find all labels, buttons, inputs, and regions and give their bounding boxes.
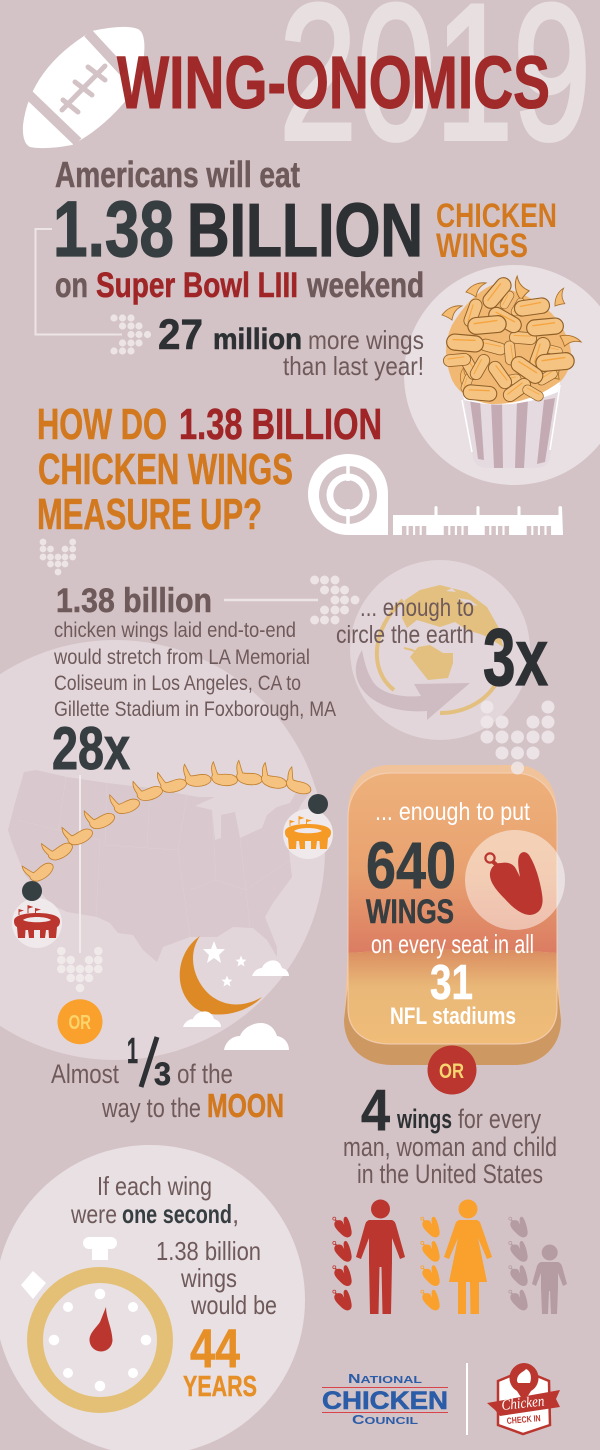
panel: stopwatch circle [0,1145,305,1450]
small dot over panel [511,762,524,774]
icon: tape measure [308,454,563,535]
icon: dotted heart arrow [57,947,103,992]
text: almost 1/3 of the way to the moon: 1 [127,1030,138,1071]
text: 1.38 billion laid end-to-end: would stretch from LA Memorial [53,645,310,669]
text: one second = 44 years: wings [180,1263,237,1293]
heading: how do 1.38 billion chicken wings measure up: HOW DO [37,401,167,449]
vertical connector line [79,775,81,953]
heading: how do 1.38 billion chicken wings measure up: CHICKEN WINGS [38,446,293,494]
headline: 1.38 billion chicken wings: CHICKEN [436,197,557,235]
text: almost 1/3 of the way to the moon: Almost [51,1059,119,1089]
headline: 1.38 billion chicken wings: 1.38 [53,184,174,273]
large circle behind US map [0,640,325,1060]
circle with drumstick icon [465,830,565,930]
icon: dotted heart arrow small [40,539,76,575]
icon: stopwatch [21,1237,165,1405]
icon: dotted heart arrow to panel [480,700,554,760]
text: enough to circle the earth 3x: 3x [483,613,548,703]
text: 27 million more wings: million [213,323,302,356]
text: 1.38 billion laid end-to-end: Coliseum in Los Angeles, CA to [54,671,301,695]
icon: bucket of wings [442,275,581,468]
icon: dotted arrow [110,314,151,355]
icon: orange stadium Foxborough [283,794,333,859]
bucket [462,382,560,468]
text: 4 wings for every man, woman and child: 4 [361,1078,390,1143]
icon: woman with 4 wings [421,1200,492,1314]
panel text: on every seat in all [371,929,534,959]
headline: 1.38 billion chicken wings [53,154,557,305]
chain of chicken wings LA to Foxborough [21,760,315,886]
logo: Chicken Check In: CHECK IN [506,1413,541,1426]
badge: OR orange: OR [68,1012,91,1034]
text: 4 wings for every man, woman and child: for every [458,1104,541,1134]
text: one second = 44 years: YEARS [183,1371,257,1403]
panel text: 31 [430,956,473,1010]
text: 1.38 billion laid end-to-end: Gillette Stadium in Foxborough, MA [54,697,337,721]
text: almost 1/3 of the way to the moon: MOON [207,1087,284,1124]
text: enough to circle the earth 3x: circle the earth [336,621,474,649]
text: 27 million more wings: than last year! [283,351,424,381]
icon: child with 4 wings [509,1217,567,1314]
text: one second = 44 years: were [70,1199,117,1229]
text: enough to circle the earth 3x [336,594,548,703]
heading: how do 1.38 billion chicken wings measure up: MEASURE UP? [37,491,262,539]
headline: 1.38 billion chicken wings: on [55,266,88,305]
bracket connector [36,229,122,334]
heading: how do 1.38 billion chicken wings measure up: 1.38 BILLION [179,401,382,449]
panel text: NFL stadiums [390,1003,516,1030]
logo: National Chicken Council: N ATIONAL [348,1371,423,1386]
logo: Chicken Check In: Chicken [501,1394,545,1414]
heading: how do 1.38 billion chicken wings measure up [37,401,382,539]
wing pile [442,275,581,404]
text: enough to circle the earth 3x: ... enough to [360,594,474,622]
text: 4 wings for every man, woman and child: in the United States [357,1159,543,1189]
icon: moon, stars and clouds [180,936,289,1050]
text: one second = 44 years: , [232,1199,239,1229]
text: 27 million more wings [158,311,424,381]
icon: dotted arrow right [310,576,360,624]
text: 4 wings for every man, woman and child: wings [396,1104,452,1134]
divider [466,1363,468,1435]
headline: 1.38 billion chicken wings: weekend [306,266,424,305]
logo: National Chicken Council [322,1371,448,1427]
logo: National Chicken Council: C OUNCIL [352,1412,419,1427]
text: one second = 44 years: 44 [190,1317,240,1379]
panel: stadium seat [344,762,565,1065]
icon: globe [377,585,503,713]
text: 1.38 billion laid end-to-end [53,582,337,721]
text: one second = 44 years: one second [122,1199,232,1229]
badge: OR red: OR [439,1060,464,1083]
text: 27 million more wings: 27 [158,311,203,359]
stat: 28x: 28x [52,715,130,782]
text: one second = 44 years: If each wing [97,1171,212,1201]
logo: Chicken Check In [487,1363,560,1434]
icon: red stadium Los Angeles [12,881,62,948]
text: 1.38 billion laid end-to-end: 1.38 billion [56,582,212,620]
text: almost 1/3 of the way to the moon: of the [177,1059,233,1089]
panel text: 640 [366,828,456,902]
headline: 1.38 billion chicken wings: BILLION [187,188,423,272]
headline: 1.38 billion chicken wings: Super Bowl LIII [96,266,298,305]
text: 4 wings for every man, woman and child [343,1078,557,1189]
text: 27 million more wings: more wings [308,325,424,355]
text: almost 1/3 of the way to the moon: 3 [154,1056,171,1092]
text: almost 1/3 of the way to the moon: way to the [101,1093,201,1123]
icon: football [23,27,144,148]
map: United States [8,770,312,962]
big circle behind bucket [404,265,600,485]
panel text [366,798,534,1030]
badge: OR orange [58,999,102,1044]
text: one second = 44 years: would be [190,1290,277,1320]
panel text: ... enough to put [375,798,530,826]
globe panel [350,560,530,740]
icon: man with 4 wings [333,1200,405,1314]
connector line to earth [224,599,318,601]
swoosh arrow [356,650,470,720]
headline: 1.38 billion chicken wings: Americans will eat [55,154,300,195]
text: almost 1/3 of the way to the moon [51,1030,284,1124]
logo: National Chicken Council: CHICKEN [322,1387,448,1415]
text: 1.38 billion laid end-to-end: chicken wings laid end-to-end [54,618,296,642]
text: one second = 44 years: 1.38 billion [156,1236,261,1266]
text: one second = 44 years [70,1171,277,1403]
badge: OR red [428,1046,476,1094]
headline: 1.38 billion chicken wings: WINGS [436,227,528,265]
panel text: WINGS [366,893,454,931]
